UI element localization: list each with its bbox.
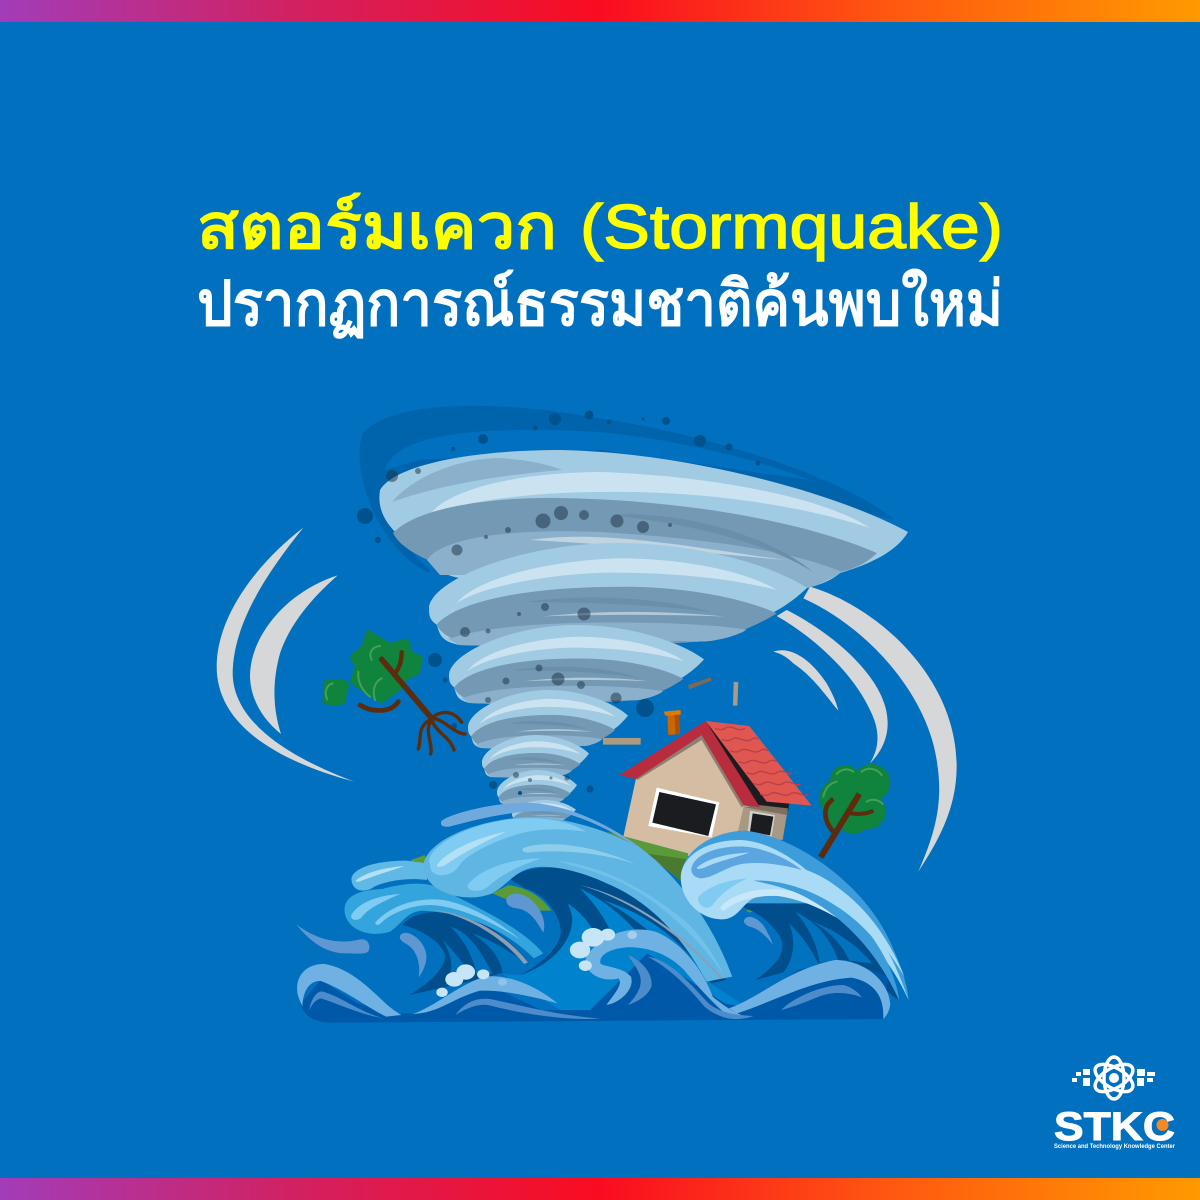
debris dots in sky xyxy=(357,410,760,795)
center dark claw xyxy=(511,868,726,983)
tornado xyxy=(357,406,908,822)
front window xyxy=(648,788,719,837)
black eave xyxy=(706,721,789,811)
debris dots on tornado xyxy=(386,468,672,782)
logo side pixels xyxy=(1072,1069,1155,1086)
green ground xyxy=(411,832,756,913)
foam center xyxy=(570,928,637,971)
tornado layer 6 xyxy=(497,770,577,804)
center water xyxy=(502,888,741,1013)
foliage xyxy=(819,764,890,834)
foliage xyxy=(352,632,421,702)
left front wave xyxy=(297,964,600,1019)
top gradient bar xyxy=(0,0,1200,22)
trunk xyxy=(360,652,465,754)
logo orange dot xyxy=(1156,1119,1168,1131)
wind strokes right xyxy=(773,587,957,872)
center front wave xyxy=(585,929,753,1019)
roof tiles xyxy=(706,721,812,806)
tornado layer 1 xyxy=(379,450,908,588)
uprooted tree left xyxy=(324,632,465,754)
tornado layer 7 xyxy=(512,800,576,822)
logo atom icon xyxy=(1091,1057,1137,1099)
foam left xyxy=(436,964,507,997)
left curl wave xyxy=(344,861,543,964)
left dark claw xyxy=(402,912,529,995)
droplets xyxy=(296,894,773,977)
bottom gradient bar xyxy=(0,1178,1200,1200)
title line 1: สตอร์มเควก xyxy=(197,192,557,262)
title line 2: ปรากฏการณ์ธรรมชาติค้นพบใหม่ xyxy=(197,268,1003,339)
claw blue stripes xyxy=(442,912,872,985)
logo tagline: Science and Technology Knowledge Center xyxy=(1054,1144,1176,1150)
flying debris xyxy=(603,677,738,745)
waves xyxy=(296,803,909,1023)
illustration: stormquake scene xyxy=(217,406,957,1023)
right curl wave xyxy=(681,831,909,1002)
red roof trim xyxy=(619,721,760,807)
center curl wave xyxy=(424,803,732,982)
logo: STKC xyxy=(1054,1057,1176,1150)
house xyxy=(603,677,812,857)
front deep water xyxy=(300,953,888,1023)
side window xyxy=(748,811,775,837)
tree right xyxy=(819,764,890,857)
side wall xyxy=(735,805,787,840)
roof shadow xyxy=(636,735,745,807)
title line 1: (Stormquake) xyxy=(580,193,1003,262)
wind strokes left xyxy=(217,528,354,782)
chimney xyxy=(664,710,681,735)
title xyxy=(197,192,1003,339)
right front wave xyxy=(729,960,890,1019)
right dark claw xyxy=(741,896,900,1002)
trunk xyxy=(821,794,873,857)
title line 1 xyxy=(197,192,1003,262)
front wall xyxy=(623,737,744,857)
tornado layer 3 xyxy=(449,625,704,704)
tornado layer 4 xyxy=(468,690,628,749)
tornado dark back swirl xyxy=(360,406,895,573)
tornado layer 2 xyxy=(429,543,807,646)
logo wordmark: STKC xyxy=(1054,1105,1175,1149)
tornado layer 5 xyxy=(482,735,589,778)
